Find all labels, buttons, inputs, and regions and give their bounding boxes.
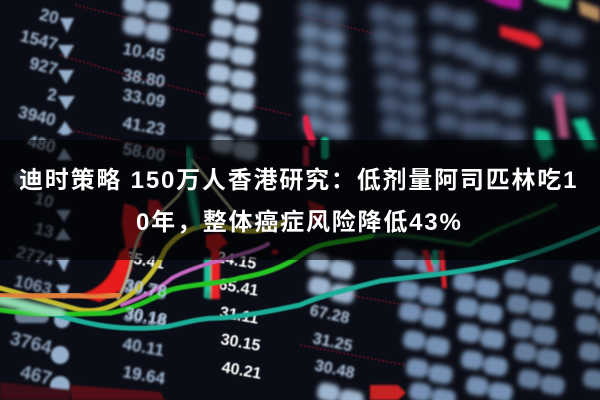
title	[19, 167, 578, 236]
column 2 numbers: 41.23	[121, 113, 167, 139]
column 2 numbers: 30.78	[122, 277, 168, 303]
dotted red grid lines	[60, 5, 432, 365]
column 4 numbers: 67.28	[308, 302, 351, 327]
column 4 numbers: 30.48	[313, 357, 356, 382]
column 1 numbers: 13	[33, 219, 56, 242]
candlesticks	[204, 115, 447, 299]
column 1 numbers: 20	[38, 5, 61, 28]
blurred lower right columns	[392, 248, 600, 400]
column 1 numbers: 467	[18, 362, 54, 390]
blurred top right coloured marks	[480, 0, 600, 161]
column 2 blurred top rows	[121, 0, 171, 43]
blurred upper right columns	[297, 0, 591, 146]
title line 1: 迪时策略 150万人香港研究：低剂量阿司匹林吃1	[19, 167, 578, 194]
column 1 numbers: 2774	[14, 242, 56, 270]
column 2 numbers: 19.64	[121, 362, 167, 388]
column 2 numbers	[121, 39, 168, 388]
column 4 blurred rows	[305, 251, 366, 400]
readable overprint numbers: 30.78	[123, 275, 169, 301]
column 1 numbers: 1063	[12, 271, 54, 299]
column 3 blurred rows	[206, 0, 261, 161]
right bright numbers: 65.41	[123, 249, 166, 273]
readable overprint numbers: 30.18	[123, 303, 169, 329]
column 2 numbers: 40.11	[121, 334, 166, 360]
column 1 numbers: 2	[46, 85, 58, 105]
column 1 numbers: 3940	[16, 102, 58, 130]
column 4 numbers: 31.25	[311, 330, 354, 355]
right bright numbers: 31.11	[218, 304, 260, 328]
right bright numbers: 30.15	[219, 331, 262, 355]
title line 2: 0年，整体癌症风险降低43%	[136, 209, 463, 236]
right bright numbers: 24.15	[215, 249, 258, 273]
column 1 arrows	[14, 18, 75, 396]
price trend lines	[0, 150, 600, 328]
column 1 numbers: 10	[33, 189, 56, 212]
column 1 numbers: 1547	[18, 26, 60, 54]
column 1 numbers	[8, 5, 61, 390]
column 4 numbers	[308, 302, 356, 382]
column 1 numbers: 480	[26, 132, 58, 157]
column 2 numbers: 33.09	[121, 85, 167, 111]
right bright numbers	[123, 249, 263, 383]
right bright numbers: 40.21	[220, 359, 263, 383]
right bright numbers: 65.41	[217, 276, 260, 300]
column 2 numbers: 58.00	[121, 139, 167, 165]
readable overprint numbers	[123, 275, 169, 329]
column 2 numbers: 30.18	[122, 305, 168, 331]
dark title band	[0, 140, 600, 260]
column 1 numbers: 3764	[8, 328, 54, 359]
column 2 numbers: 10.45	[121, 39, 167, 65]
column 2 numbers: 38.80	[121, 65, 167, 91]
red chart blocks	[0, 200, 406, 400]
column 1 numbers: 927	[28, 54, 60, 79]
